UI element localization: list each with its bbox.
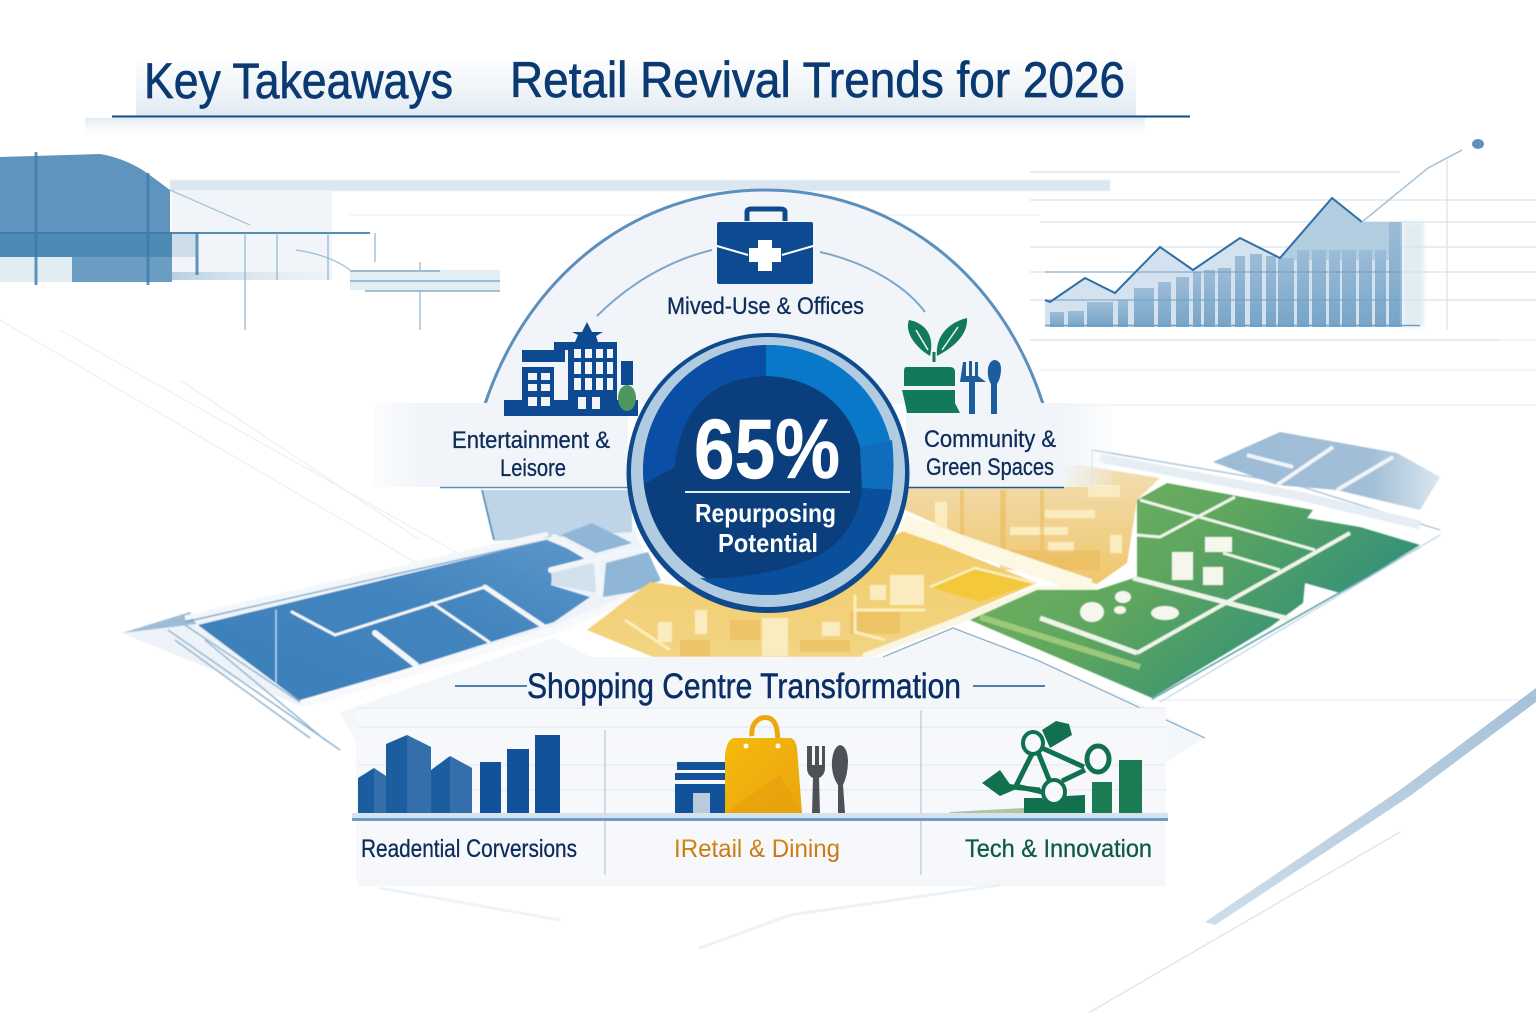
icon: store, shopping bag and cutlery — [675, 718, 848, 813]
central badge: 65% repurposing potential: Potential — [718, 528, 818, 558]
label: tech and innovation: Tech & Innovation — [965, 835, 1152, 863]
isometric map: green community zone — [970, 483, 1440, 702]
central badge: 65% repurposing potential: Repurposing — [695, 498, 836, 528]
label: community and green spaces: Community & — [924, 426, 1056, 453]
title — [85, 52, 1190, 136]
heading: shopping centre transformation: Shopping Centre Transformation — [527, 667, 961, 706]
isometric map: blue residential zone — [122, 490, 672, 750]
icon: plant, pot and cutlery — [902, 318, 1001, 414]
label: entertainment and leisure: Leisore — [500, 455, 566, 482]
isometric map: pale blue rear zone — [1092, 432, 1440, 530]
isometric map: yellow retail zone — [587, 465, 1160, 657]
title: Key Takeaways — [144, 53, 453, 109]
icon: entertainment building — [504, 322, 638, 416]
line and bar growth chart — [1030, 139, 1536, 340]
icon: tech network and bars — [950, 721, 1142, 813]
icon: briefcase — [717, 209, 813, 284]
label: community and green spaces: Green Spaces — [926, 454, 1054, 481]
central badge: 65% repurposing potential — [626, 333, 910, 613]
title: Retail Revival Trends for 2026 — [510, 52, 1125, 108]
label: residential conversions: Readential Corversions — [361, 835, 577, 863]
semi-circular arch panel — [374, 190, 1112, 488]
label: community and green spaces — [924, 426, 1056, 481]
label: entertainment and leisure — [452, 427, 610, 482]
panel: shopping centre transformation — [340, 628, 1205, 886]
background: blurred building sketch — [0, 152, 500, 330]
label: entertainment and leisure: Entertainment & — [452, 427, 610, 454]
label: retail and dining: IRetail & Dining — [674, 835, 840, 863]
value: 65%: 65% — [694, 402, 840, 496]
label: mixed-use and offices: Mived-Use & Offices — [667, 293, 864, 320]
icon: residential towers and bars — [358, 735, 560, 813]
